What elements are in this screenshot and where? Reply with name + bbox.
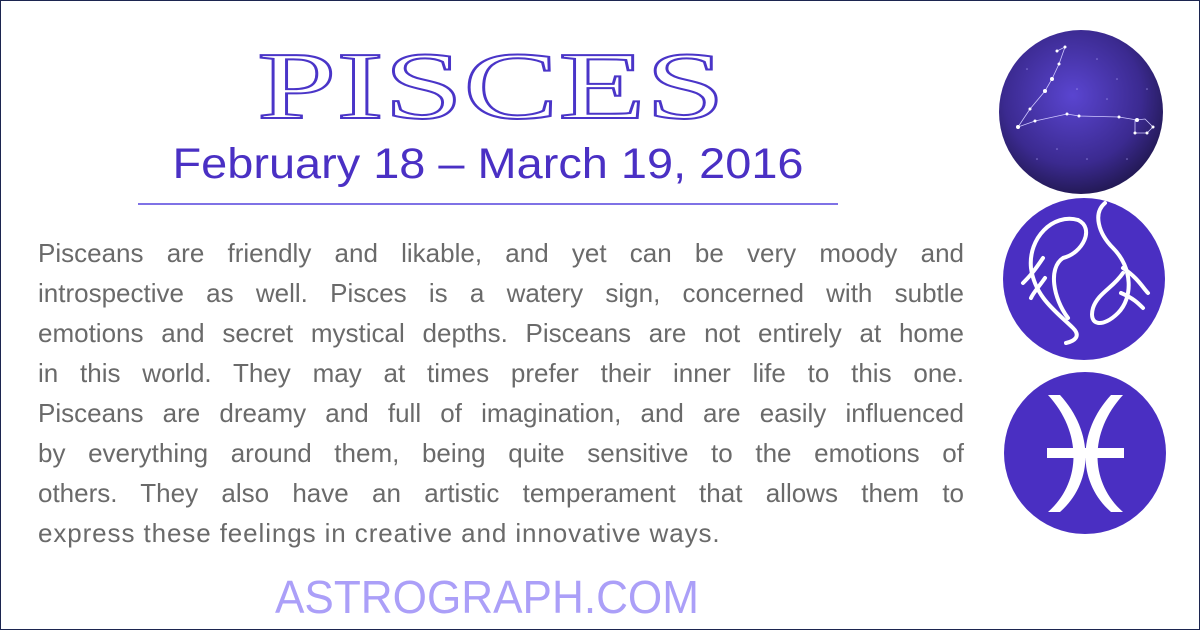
text block: description: Pisceans are dreamy and full of imagination, and are easily influenced [38, 398, 964, 428]
footer: website: ASTROGRAPH.COM [275, 571, 699, 623]
icon: two fish [1003, 198, 1165, 360]
text block: description: Pisceans are friendly and likable, and yet can be very moody and [38, 238, 964, 268]
icon: constellation [999, 30, 1163, 194]
date heading: February 18 – March 19, 2016 [172, 140, 804, 188]
text block: description: emotions and secret mystical depths. Pisceans are not entirely at home [38, 318, 964, 348]
text block: description: by everything around them, being quite sensitive to the emotions of [38, 438, 964, 468]
icon: pisces symbol [1004, 372, 1166, 534]
text block: description: express these feelings in creative and innovative ways. [38, 518, 721, 548]
text block: description [38, 238, 964, 548]
text block: description: introspective as well. Pisces is a watery sign, concerned with subtle [38, 278, 964, 308]
divider line [138, 203, 838, 205]
text block: description: others. They also have an artistic temperament that allows them to [38, 478, 964, 508]
text block: description: in this world. They may at times prefer their inner life to this one. [38, 358, 964, 388]
